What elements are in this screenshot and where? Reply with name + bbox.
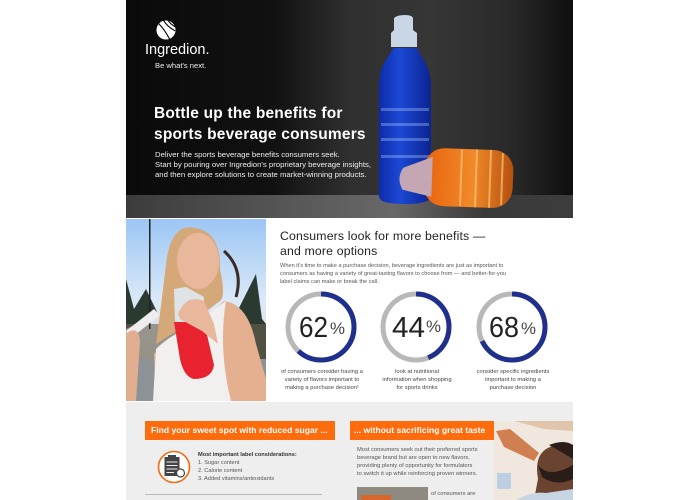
hero intro text: and then explore solutions to create market-winning products. <box>155 170 367 179</box>
stat caption 68%: important to making a <box>485 377 541 383</box>
orange heading: great taste: ... without sacrificing great taste <box>354 425 485 435</box>
logo icon <box>156 20 176 40</box>
photo: man drinking orange bottle <box>494 421 573 500</box>
hero heading: Bottle up the benefits for <box>154 105 343 122</box>
donut: 62% <box>288 294 354 360</box>
donut: 68%: % <box>521 319 536 338</box>
hero intro text: Deliver the sports beverage benefits consumers seek. <box>155 150 340 159</box>
divider rule <box>145 494 322 495</box>
hero intro text: Start by pouring over Ingredion's proprietary beverage insights, <box>155 160 371 169</box>
taste body text <box>357 447 478 477</box>
section body text: consumers as having a variety of great-tasting flavors to choose from — and better-for-you <box>280 271 506 277</box>
hero photo: two sports bottles on a table <box>126 0 573 218</box>
label considerations list: Most important label considerations: <box>198 452 297 458</box>
stat caption 62% <box>281 369 363 391</box>
stat caption 62%: of consumers consider having a <box>281 369 363 375</box>
stat caption 44% <box>382 369 452 391</box>
section heading <box>280 229 486 258</box>
donut: 68%: 68 <box>489 312 519 344</box>
hero heading <box>154 105 366 142</box>
label considerations list: 1. Sugar content <box>198 460 239 466</box>
hero intro text <box>155 150 371 179</box>
logo wordmark: Ingredion. <box>145 42 210 58</box>
donut: 44% <box>383 294 449 360</box>
orange heading: reduced sugar <box>145 421 335 440</box>
donut charts <box>286 292 548 362</box>
stat caption 44%: for sports drinks <box>396 385 438 391</box>
hero heading: sports beverage consumers <box>154 126 366 142</box>
donut: 44%: 44 <box>392 312 425 344</box>
stat caption 62%: variety of flavors important to <box>285 377 359 383</box>
taste body text: Most consumers seek out their preferred sports <box>357 447 477 453</box>
icon: clipboard with apple <box>158 450 190 484</box>
section heading: and more options <box>280 244 377 258</box>
donut: 62%: 62 <box>299 312 328 344</box>
panel: sugar and taste <box>126 402 573 500</box>
donut: 62%: % <box>330 319 345 338</box>
stat caption 62%: making a purchase decision¹ <box>285 385 359 391</box>
thumbnail caption: of consumers are <box>431 491 475 497</box>
label considerations list: 3. Added vitamins/antioxidants <box>198 476 274 482</box>
taste body text: beverage brand but are open to new flavors, <box>357 455 470 461</box>
stat caption 68%: consider specific ingredients <box>477 369 549 375</box>
hero panel <box>126 0 573 218</box>
orange heading: great taste <box>350 421 494 440</box>
label considerations list <box>198 452 297 482</box>
panel: consumers look for more benefits <box>126 219 573 402</box>
thumbnail photo <box>357 487 428 500</box>
section body text <box>280 263 506 285</box>
stat caption 68%: purchase decision <box>490 385 536 391</box>
taste body text: providing plenty of opportunity for formulators <box>357 463 472 469</box>
section heading: Consumers look for more benefits — <box>280 229 485 243</box>
section body text: label claims can make or break the call. <box>280 279 379 285</box>
tagline: Be what's next. <box>155 61 206 70</box>
stat caption 44%: look at nutritional <box>395 369 439 375</box>
section body text: When it's time to make a purchase decision, beverage ingredients are just as important to <box>280 263 503 269</box>
label considerations list: 2. Calorie content <box>198 468 242 474</box>
stat caption 68% <box>476 369 550 391</box>
taste body text: to switch it up while reinforcing proven winners. <box>357 471 477 477</box>
stat caption 44%: information when shopping <box>382 377 452 383</box>
orange heading: reduced sugar: Find your sweet spot with reduced sugar ... <box>151 425 328 435</box>
donut: 44%: % <box>426 317 441 336</box>
photo: woman with red sports drink and racket <box>126 219 266 401</box>
donut: 68% <box>479 294 545 360</box>
